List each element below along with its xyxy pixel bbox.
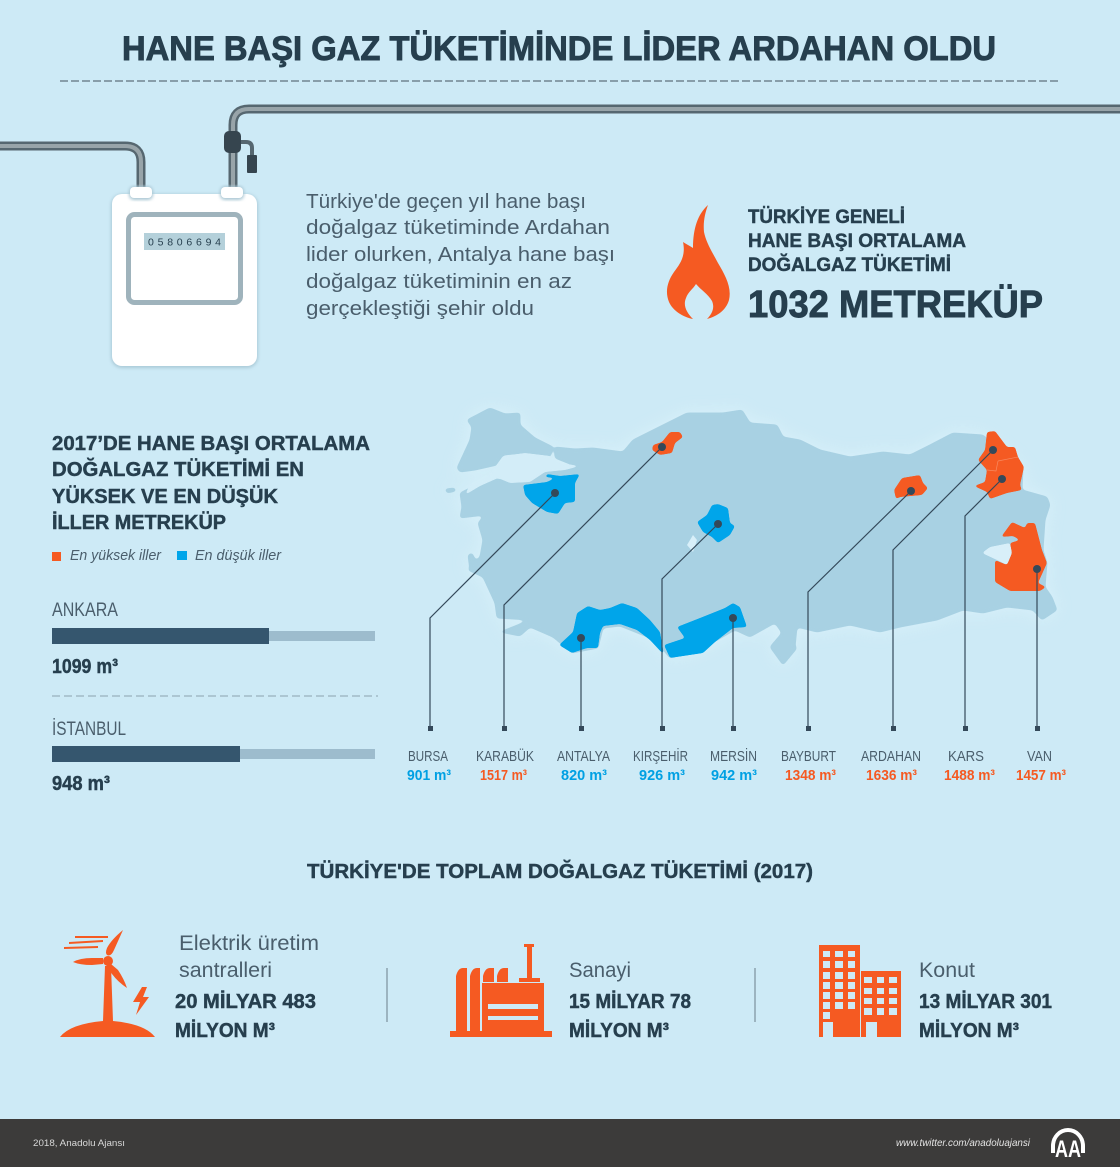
stat: electricity: 20 MİLYAR 483	[175, 990, 316, 1013]
stat: residential: MİLYON M³	[919, 1019, 1019, 1042]
province labels: ANTALYA	[557, 748, 610, 765]
intro text: lider olurken, Antalya hane başı	[306, 244, 615, 266]
province: Karabük	[652, 432, 683, 455]
icon: flame	[667, 205, 730, 319]
province: Bursa	[523, 474, 580, 514]
stat: industry: Sanayi	[569, 959, 631, 982]
stat: industry	[569, 959, 691, 1042]
province labels: 820 m³	[561, 767, 607, 784]
map heading: İLLER METREKÜP	[52, 511, 226, 534]
intro text: doğalgaz tüketiminde Ardahan	[306, 217, 610, 239]
stat: industry: 15 MİLYAR 78	[569, 990, 691, 1013]
leader lines	[430, 447, 1037, 728]
icon: factory	[450, 944, 552, 1037]
province: Bayburt	[894, 475, 928, 499]
bar: İstanbul: İSTANBUL	[52, 719, 126, 740]
province labels: 942 m³	[711, 767, 757, 784]
stat: residential: Konut	[919, 959, 975, 982]
title: HANE BAŞI GAZ TÜKETİMİNDE LİDER ARDAHAN OLDU	[122, 30, 996, 68]
national average callout: HANE BAŞI ORTALAMA	[748, 231, 966, 252]
province: Mersin	[664, 603, 747, 658]
province labels: KIRŞEHİR	[633, 747, 688, 765]
province labels: 1457 m³	[1016, 767, 1066, 784]
national average callout	[748, 207, 1043, 326]
icon: wind turbine	[60, 930, 155, 1037]
province labels: 926 m³	[639, 767, 685, 784]
bar: İstanbul: 948 m³	[52, 773, 110, 795]
province labels: 1348 m³	[785, 767, 836, 784]
icon: pipe valve	[224, 131, 257, 173]
province labels	[407, 747, 1066, 784]
intro text: Türkiye'de geçen yıl hane başı	[306, 191, 586, 213]
bar: Ankara: 1099 m³	[52, 656, 118, 678]
province labels: BURSA	[408, 748, 448, 765]
stat: residential: 13 MİLYAR 301	[919, 990, 1052, 1013]
intro text: gerçekleştiği şehir oldu	[306, 298, 534, 320]
province: Ardahan and Kars	[974, 431, 1024, 499]
national average callout: TÜRKİYE GENELİ	[748, 207, 905, 228]
province labels: 1636 m³	[866, 767, 917, 784]
map heading: 2017’DE HANE BAŞI ORTALAMA	[52, 433, 370, 455]
stat: electricity: santralleri	[179, 959, 272, 982]
bar: Ankara	[52, 600, 375, 678]
province: Kırşehir	[697, 504, 735, 543]
legend: En yüksek iller	[70, 547, 162, 564]
leader dots and end markers	[428, 443, 1041, 731]
stat: electricity: MİLYON M³	[175, 1019, 275, 1042]
province labels: ARDAHAN	[861, 748, 921, 765]
stat: electricity: Elektrik üretim	[179, 932, 319, 955]
map of Turkey	[445, 408, 1057, 665]
province labels: 1488 m³	[944, 767, 995, 784]
footer: 2018, Anadolu Ajansı	[33, 1138, 125, 1149]
province labels: KARABÜK	[476, 747, 534, 765]
province labels: 901 m³	[407, 767, 451, 784]
lakes	[687, 535, 697, 552]
bar: İstanbul	[52, 719, 375, 795]
province labels: VAN	[1027, 748, 1052, 765]
icon: AA logo	[1053, 1130, 1083, 1163]
footer	[0, 1119, 1120, 1167]
intro text: doğalgaz tüketiminin en az	[306, 271, 572, 293]
province: Van	[995, 522, 1047, 591]
stat: industry: MİLYON M³	[569, 1019, 669, 1042]
icon: gas meter	[111, 186, 258, 368]
sea of Marmara	[465, 453, 580, 495]
map heading: DOĞALGAZ TÜKETİMİ EN	[52, 457, 304, 481]
legend	[52, 547, 282, 564]
section heading: total consumption: TÜRKİYE'DE TOPLAM DOĞALGAZ TÜKETİMİ (2017)	[307, 859, 813, 883]
province labels: KARS	[948, 748, 984, 765]
bar: Ankara: ANKARA	[52, 600, 118, 621]
icon: AA logo: AA	[1055, 1136, 1081, 1163]
gas pipes	[0, 109, 1120, 190]
national average callout: DOĞALGAZ TÜKETİMİ	[748, 254, 951, 276]
stat: electricity	[175, 932, 319, 1042]
icon: apartment buildings	[819, 945, 901, 1037]
national average callout: 1032 METREKÜP	[748, 283, 1043, 326]
map heading	[52, 433, 370, 534]
legend: En düşük iller	[195, 547, 282, 564]
stat: residential	[919, 959, 1052, 1042]
icon: gas meter: 05806694	[148, 236, 221, 248]
province labels: 1517 m³	[480, 767, 527, 784]
province labels: MERSİN	[710, 747, 757, 765]
footer: www.twitter.com/anadoluajansi	[896, 1137, 1031, 1149]
intro text	[306, 191, 615, 320]
map heading: YÜKSEK VE EN DÜŞÜK	[52, 485, 279, 508]
base map	[445, 408, 1057, 665]
province: Antalya	[559, 603, 664, 655]
province labels: BAYBURT	[781, 748, 836, 765]
